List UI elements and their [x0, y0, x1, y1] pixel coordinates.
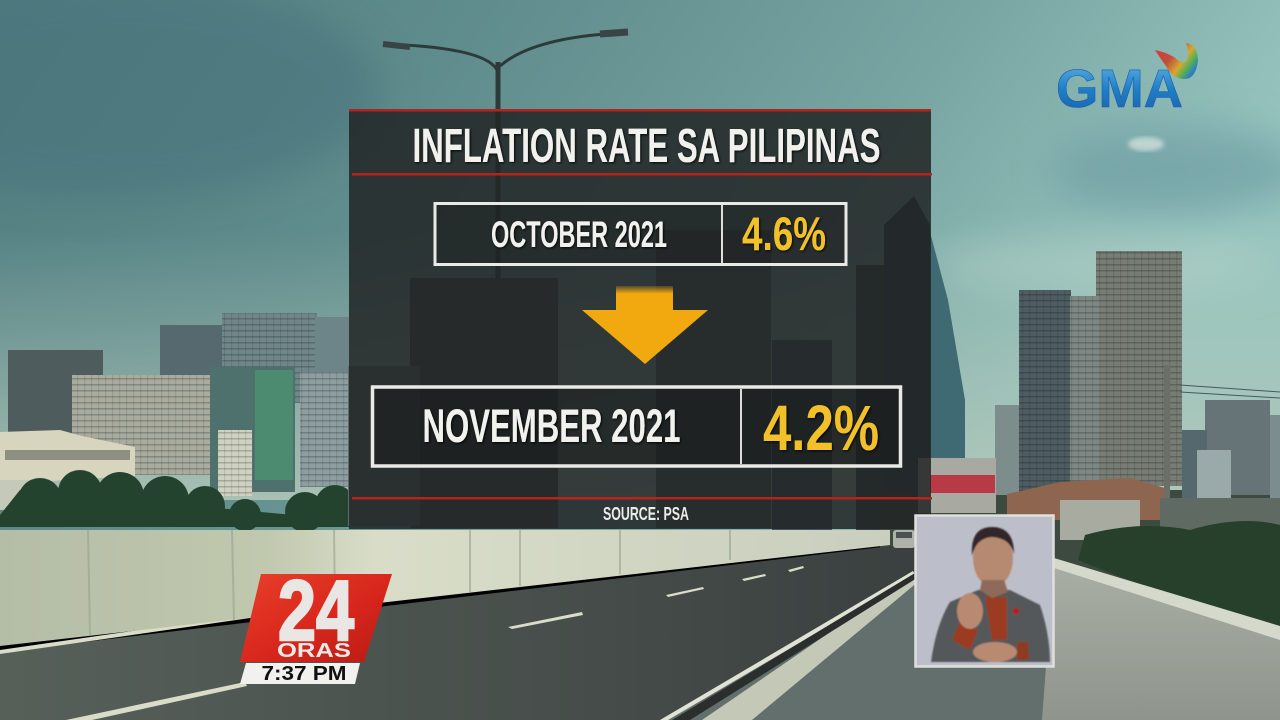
- heading: INFLATION RATE SA PILIPINAS: [412, 120, 880, 173]
- numerals: 24: [278, 564, 354, 659]
- ground behind right side: [880, 490, 1280, 640]
- panel background: [349, 110, 931, 529]
- concrete barrier left: [0, 530, 890, 646]
- road: [0, 546, 916, 720]
- buildings right: [918, 251, 1280, 640]
- logo: GMA: GMA: [1056, 59, 1183, 119]
- row: October 2021: [435, 204, 846, 264]
- road markings: [0, 556, 804, 720]
- oras: ORAS: [277, 640, 351, 662]
- panel: inflation graphic: [349, 109, 932, 529]
- icon: down arrow: [582, 286, 708, 364]
- logo: 24 Oras: 7:37 PM: [262, 663, 346, 685]
- sky background: [0, 0, 1280, 540]
- red rules: [349, 109, 932, 500]
- buildings centre behind panel: [348, 196, 965, 530]
- row: November 2021: NOVEMBER 2021: [422, 399, 680, 452]
- sign language interpreter inset: [916, 516, 1054, 666]
- source: SOURCE: PSA: [603, 504, 689, 524]
- buildings left: [0, 313, 350, 510]
- inset frame: [916, 516, 1054, 666]
- row: October 2021: OCTOBER 2021: [491, 214, 667, 255]
- row: November 2021: 4.2%: [763, 392, 879, 464]
- concrete barrier right: [1042, 558, 1280, 720]
- street lamp: [383, 32, 628, 528]
- logo: 24 Oras: [240, 564, 392, 685]
- red badge: [240, 574, 392, 662]
- row: November 2021: [372, 387, 900, 466]
- time strip: [240, 663, 360, 684]
- row: October 2021: 4.6%: [742, 207, 826, 260]
- trees left: [0, 470, 355, 532]
- interpreter figure: [931, 527, 1050, 662]
- car: [893, 530, 915, 548]
- sidewalk: [660, 555, 1058, 720]
